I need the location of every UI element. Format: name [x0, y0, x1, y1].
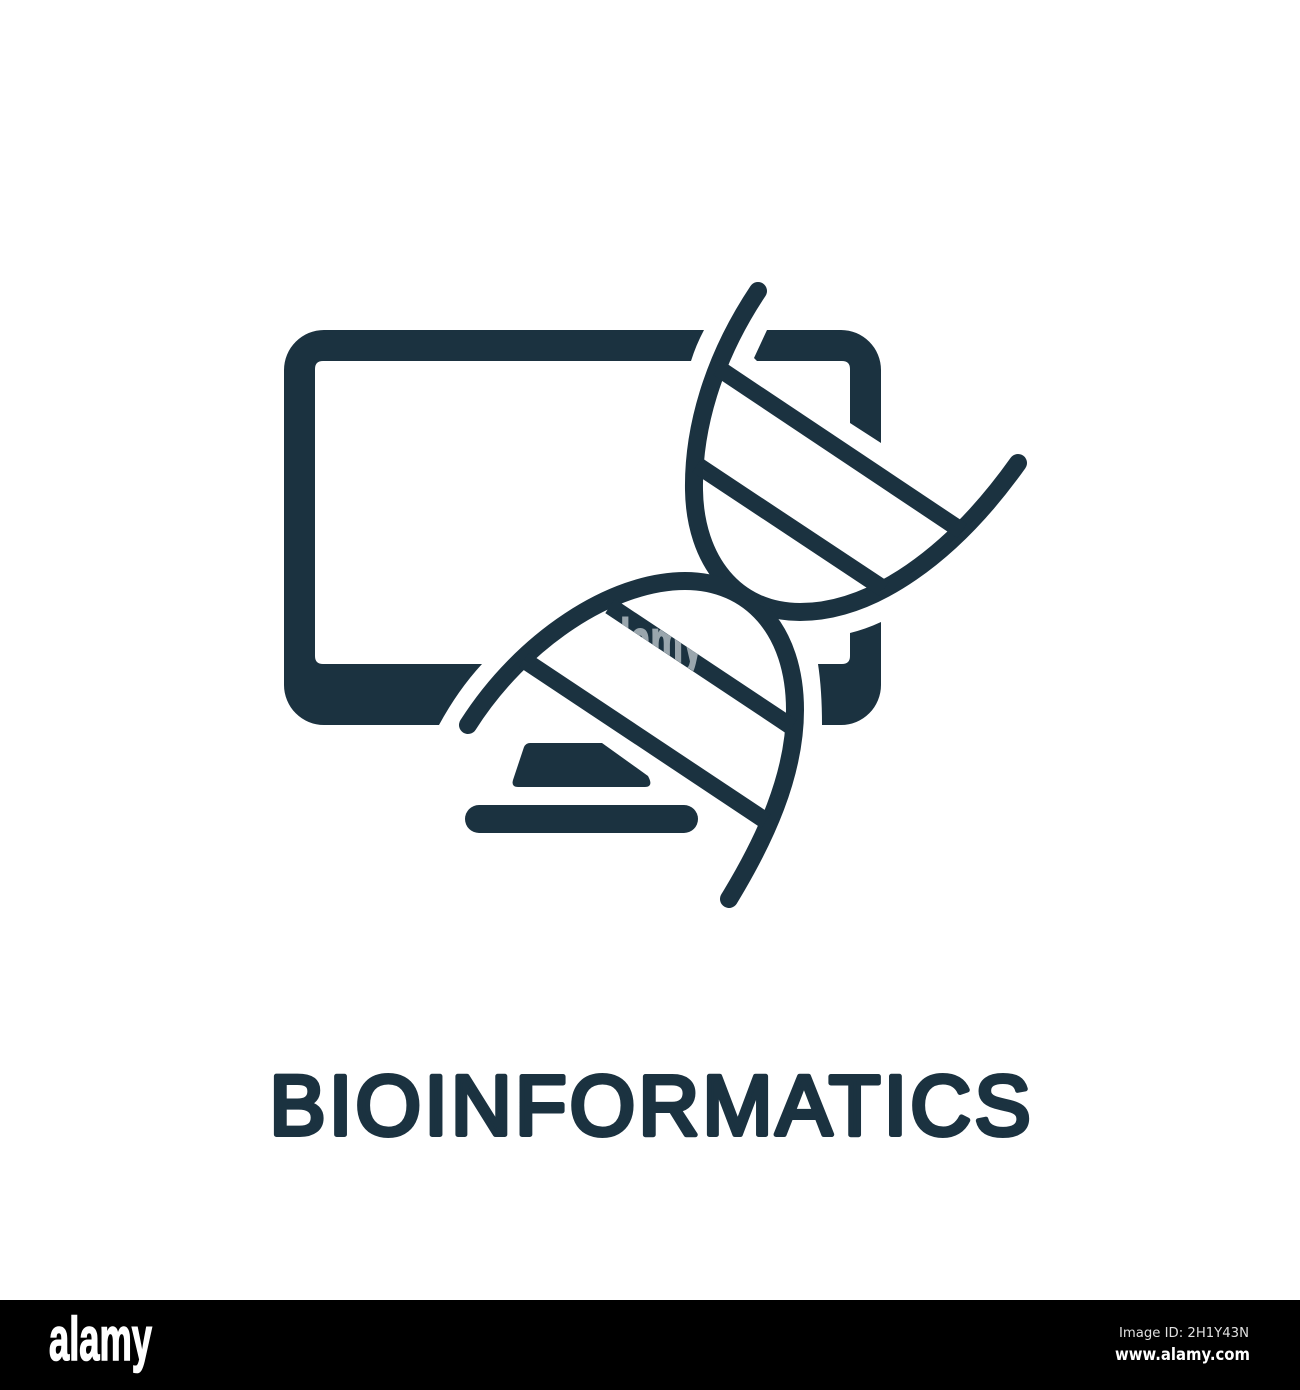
footer logo: alamy: alamy [49, 1305, 152, 1373]
monitor frame: left and top section [284, 330, 704, 725]
DNA strand: lower [468, 581, 795, 899]
DNA base pair rungs [524, 368, 962, 821]
DNA strand: upper [694, 291, 1018, 612]
infographic canvas [0, 282, 1300, 1390]
monitor frame: bottom right corner [818, 622, 881, 725]
monitor stand base [465, 805, 698, 833]
footer bar [0, 1300, 1300, 1390]
title: BIOINFORMATICS: BIOINFORMATICS [270, 1058, 1030, 1152]
monitor frame: top right corner [754, 330, 881, 443]
footer image id: Image ID: 2H1Y43N [1119, 1325, 1249, 1341]
icon: computer monitor [284, 330, 881, 833]
monitor stand neck [513, 743, 650, 787]
watermark fragment on rung: alamy [600, 607, 703, 675]
icon: DNA double helix [468, 291, 1018, 899]
footer website: www.alamy.com [1115, 1345, 1250, 1365]
